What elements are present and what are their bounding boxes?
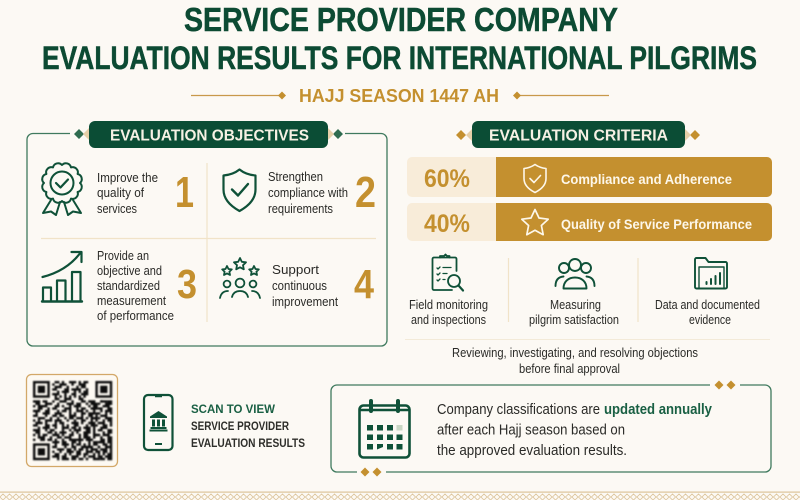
method: documented evidence: Data and documented bbox=[655, 297, 760, 312]
scan to view text: SCAN TO VIEW bbox=[191, 402, 276, 416]
callout: annual update: updated annually bbox=[604, 401, 713, 418]
icon: calendar bbox=[360, 401, 410, 458]
icon: phone with institution bbox=[144, 395, 172, 450]
objections note: Reviewing, investigating, and resolving objections bbox=[452, 345, 698, 360]
criterion bar: 60% compliance: Compliance and Adherence bbox=[561, 171, 732, 187]
objective 3: objective and bbox=[97, 263, 162, 278]
criterion bar: 40% quality: 40% bbox=[424, 210, 470, 238]
title: SERVICE PROVIDER COMPANY bbox=[184, 1, 618, 38]
method: pilgrim satisfaction: pilgrim satisfaction bbox=[529, 312, 619, 327]
objective 1: services bbox=[97, 201, 137, 216]
objective 2: 2 bbox=[355, 168, 376, 217]
objective 2: Strengthen bbox=[268, 169, 323, 184]
icon: folder with chart bbox=[695, 258, 727, 288]
objective 2 bbox=[224, 168, 376, 217]
objective 1 bbox=[42, 163, 194, 217]
objective 4: improvement bbox=[272, 294, 338, 309]
scan to view text bbox=[191, 402, 305, 450]
title bbox=[42, 1, 757, 76]
objective 3: 3 bbox=[177, 261, 197, 307]
panel: evaluation objectives bbox=[27, 121, 387, 346]
callout: annual update: after each Hajj season based on bbox=[437, 422, 625, 438]
icon: rising bar chart bbox=[42, 252, 82, 302]
objective 4: Support bbox=[272, 262, 319, 277]
objective 3: Provide an bbox=[97, 248, 149, 263]
objective 1: quality of bbox=[97, 185, 144, 200]
icon: three people bbox=[556, 259, 594, 288]
icon: rosette bbox=[42, 163, 82, 215]
objective 4: 4 bbox=[354, 261, 374, 307]
objective 3 bbox=[42, 248, 197, 323]
dividers bbox=[508, 258, 638, 322]
objective 2: requirements bbox=[268, 201, 333, 216]
criterion bar: 60% compliance: 60% bbox=[424, 165, 470, 193]
scan to view text: EVALUATION RESULTS bbox=[191, 436, 305, 450]
objective 4: continuous bbox=[272, 278, 327, 293]
footer ornament band bbox=[0, 492, 800, 500]
method: documented evidence: evidence bbox=[689, 312, 731, 327]
heading: evaluation criteria bbox=[456, 121, 700, 148]
objective 1: Improve the bbox=[97, 170, 158, 185]
objective 3: of performance bbox=[97, 308, 174, 323]
method: documented evidence bbox=[655, 258, 760, 327]
icon: shield check bbox=[224, 170, 256, 211]
objective 3: standardized bbox=[97, 278, 160, 293]
method: field monitoring: Field monitoring bbox=[409, 297, 488, 312]
callout: annual update bbox=[331, 380, 771, 476]
QR code bbox=[26, 374, 118, 466]
method: pilgrim satisfaction bbox=[529, 259, 619, 327]
method: field monitoring: and inspections bbox=[411, 312, 486, 327]
subtitle: Hajj season: HAJJ SEASON 1447 AH bbox=[299, 85, 499, 106]
criterion bar: 40% quality: Quality of Service Performance bbox=[561, 216, 752, 232]
objective 4 bbox=[220, 258, 374, 309]
method: pilgrim satisfaction: Measuring bbox=[550, 297, 601, 312]
objections note: before final approval bbox=[519, 361, 620, 376]
heading: evaluation objectives bbox=[74, 121, 343, 148]
icon: team with stars bbox=[220, 258, 260, 298]
method: field monitoring bbox=[409, 254, 488, 327]
icon: star bbox=[522, 210, 548, 235]
heading: evaluation criteria: EVALUATION CRITERIA bbox=[489, 128, 668, 144]
scan to view text: SERVICE PROVIDER bbox=[191, 419, 289, 433]
callout: annual update: the approved evaluation results. bbox=[437, 442, 627, 459]
callout: annual update: Company classifications are bbox=[437, 401, 600, 418]
objective 3: measurement bbox=[97, 293, 166, 308]
subtitle: Hajj season bbox=[191, 85, 609, 106]
objective 1: 1 bbox=[175, 168, 194, 217]
objections note bbox=[405, 340, 770, 376]
criterion bar: 60% compliance bbox=[407, 157, 772, 197]
icon: clipboard with magnifier bbox=[432, 254, 463, 290]
objective 2: compliance with bbox=[268, 185, 348, 200]
criterion bar: 40% quality bbox=[407, 203, 772, 241]
heading: evaluation objectives: EVALUATION OBJECTIVES bbox=[110, 128, 309, 144]
icon: shield bbox=[524, 164, 546, 192]
